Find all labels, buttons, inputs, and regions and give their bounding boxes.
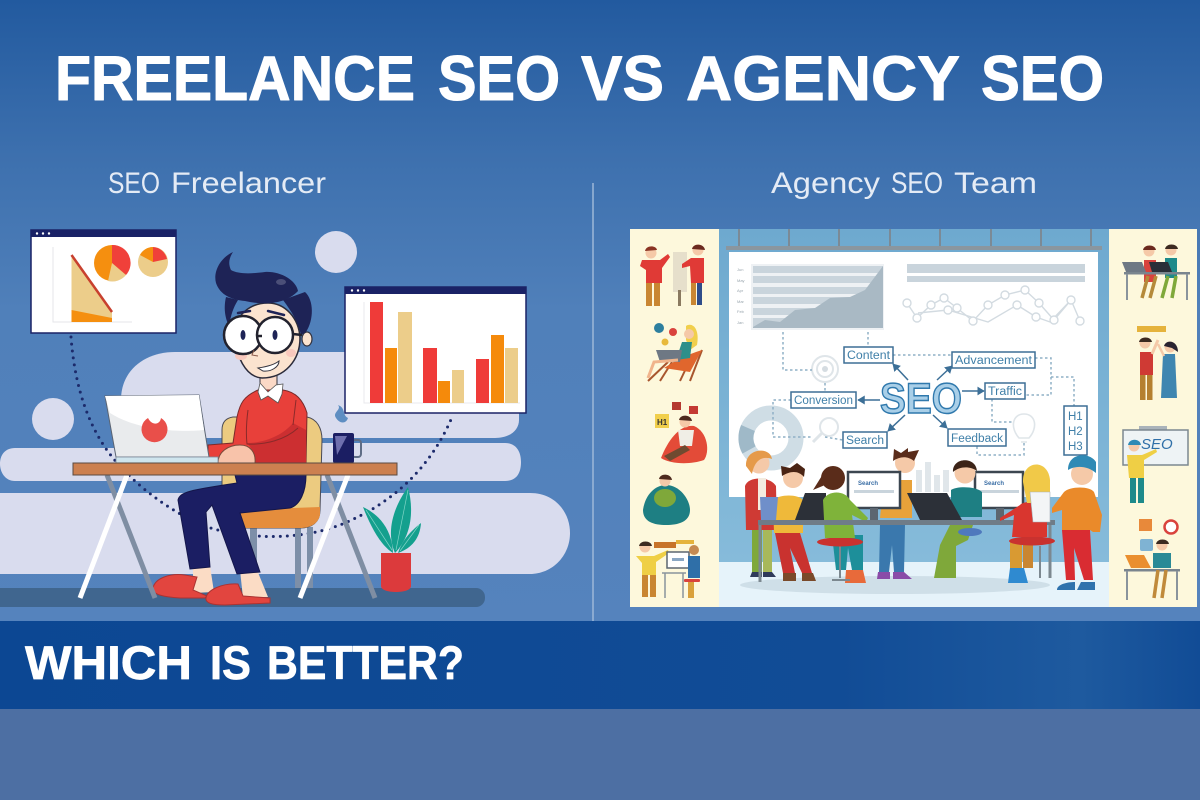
label text: H3 [1068, 441, 1083, 453]
heading: SEO Freelancer [108, 167, 326, 200]
bottom banner [0, 621, 1200, 709]
banner question: BETTER? [267, 636, 464, 689]
banner question [25, 636, 464, 689]
desk [73, 463, 397, 598]
man on red bean bag [655, 402, 707, 463]
boy in yellow seated [760, 463, 816, 581]
panel: freelancer illustration [0, 230, 570, 607]
heading: SEO Freelancer: SEO [108, 167, 160, 200]
team table scene [745, 448, 1102, 590]
floor shadow [0, 588, 485, 607]
heading: SEO Freelancer: Freelancer [171, 167, 326, 200]
label text: H2 [1068, 426, 1083, 438]
ankles and slippers [153, 566, 270, 605]
label text: Traffic [988, 386, 1022, 398]
man on red bean bag: H1 [657, 418, 668, 427]
ear [302, 332, 312, 346]
trousers [178, 475, 306, 574]
collar [258, 383, 283, 403]
smile [258, 361, 279, 371]
board: area chart: Apr [737, 288, 744, 293]
banner question: WHICH [25, 636, 192, 689]
title: SEO [981, 44, 1104, 114]
label text: Advancement [955, 355, 1033, 367]
board: area chart: May [737, 278, 745, 283]
title: FREELANCE [55, 44, 415, 114]
panel: agency SEO team illustration [630, 229, 1197, 607]
title [55, 44, 1104, 114]
board: header bars [907, 264, 1085, 282]
heading: Agency SEO Team: Agency [771, 167, 880, 200]
standing man centre [877, 448, 919, 579]
man in teal seated [934, 460, 982, 578]
boy in blue cap [1052, 455, 1102, 590]
label text: H1 [1068, 411, 1083, 423]
SEO arrows [858, 364, 984, 431]
laptop worker with icons [1124, 519, 1180, 600]
potted plant [363, 487, 421, 592]
title: VS [581, 44, 664, 114]
monitor right [975, 472, 1023, 520]
title: SEO [438, 44, 560, 114]
board: network line chart [903, 286, 1084, 325]
board: area chart: Jan [737, 320, 743, 325]
heading: Agency SEO Team: SEO [891, 167, 943, 200]
board: area chart: Feb [737, 309, 745, 314]
girl in green from behind [813, 466, 868, 583]
man at SEO whiteboard [1123, 426, 1188, 503]
neck [260, 372, 277, 394]
SEO word: SEO [880, 375, 962, 423]
desk scene [636, 540, 700, 598]
heading: Agency SEO Team: Team [954, 167, 1037, 200]
red sweater with arm [208, 390, 307, 463]
label text [794, 350, 1083, 453]
title: AGENCY [686, 44, 960, 114]
label text: Conversion [794, 395, 853, 407]
board: pale donut, target, magnifier, bulb, bars [746, 356, 1035, 463]
glasses [224, 316, 302, 354]
cream side strips [630, 229, 719, 607]
person: freelancer [153, 252, 312, 605]
coffee mug with steam [333, 405, 361, 463]
monitor left [848, 472, 900, 520]
side vignettes: left strip [636, 244, 707, 598]
window: bar chart [345, 287, 526, 413]
monitor right: Search [984, 481, 1004, 487]
laptop centre [907, 493, 962, 520]
chair [222, 417, 322, 588]
board: area chart: Jun [737, 267, 743, 272]
banner question: IS [210, 636, 251, 689]
laptop [105, 395, 218, 463]
flipchart pair [640, 244, 705, 306]
face [234, 303, 300, 378]
man at SEO whiteboard: SEO [1141, 436, 1173, 453]
background clouds [0, 231, 570, 574]
office wall and floor [719, 229, 1109, 562]
window: pie charts [31, 230, 176, 333]
dotted connector arc [71, 337, 453, 537]
board: area chart [737, 264, 884, 330]
label text: Content [847, 350, 891, 362]
man on teal bean bag [643, 475, 690, 525]
projection board [729, 252, 1098, 497]
heading: Agency SEO Team [771, 167, 1037, 200]
monitor left: Search [858, 481, 878, 487]
laptop left [795, 493, 826, 520]
high-five pair [1137, 326, 1178, 400]
woman on deck chair [648, 323, 702, 381]
projector rail [726, 229, 1102, 248]
table [758, 520, 1055, 582]
blonde woman with paper [1000, 464, 1055, 583]
side vignettes: right strip [1122, 244, 1190, 600]
woman standing left [745, 451, 777, 577]
dashed connectors [773, 332, 1074, 455]
pair with laptops [1122, 244, 1190, 300]
hand [218, 445, 255, 463]
label boxes [791, 347, 1087, 455]
hair [215, 252, 312, 335]
label text: Search [846, 435, 884, 447]
board: area chart: Mar [737, 299, 745, 304]
label text: Feedback [951, 433, 1003, 445]
